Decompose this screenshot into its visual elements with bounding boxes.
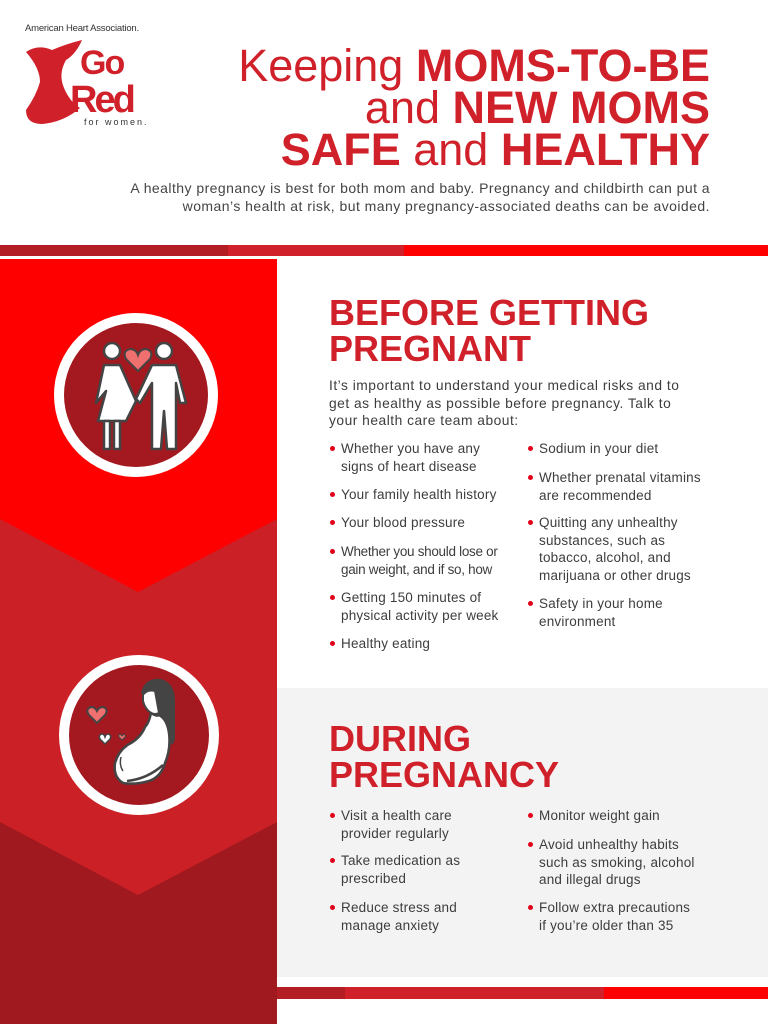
bullet list: before pregnancy: tobacco, alcohol, and (539, 550, 671, 565)
bullet list: during pregnancy: such as smoking, alcohol (539, 854, 695, 870)
bullet list: during pregnancy: prescribed (341, 870, 406, 886)
bullet list: during pregnancy: if you’re older than 35 (539, 918, 673, 932)
bullet list: before pregnancy: gain weight, and if so, how (341, 562, 492, 576)
bullet list: before pregnancy: physical activity per week (341, 608, 499, 622)
bullet list: during pregnancy: Follow extra precautions (539, 900, 690, 915)
logo (25, 23, 149, 127)
left column chevrons (0, 259, 277, 1024)
bullet list: before pregnancy: Sodium in your diet (539, 441, 658, 456)
logo: red dress and wordmark: Go (80, 44, 124, 82)
logo: association name: American Heart Association. (25, 23, 139, 34)
bullet list: before pregnancy: Your blood pressure (341, 515, 465, 530)
bullet list: before pregnancy: Getting 150 minutes of (341, 590, 481, 605)
bullet list: before pregnancy (330, 441, 701, 651)
bullet list: before pregnancy: Healthy eating (341, 636, 430, 651)
heading (329, 292, 649, 369)
section: before getting pregnant (329, 292, 679, 428)
bullet list: before pregnancy: are recommended (539, 488, 652, 502)
subtitle (130, 180, 710, 214)
bullet list: during pregnancy (330, 808, 695, 933)
bullet list: before pregnancy: substances, such as (539, 532, 665, 548)
bullet list: during pregnancy: Visit a health care (341, 808, 452, 823)
bullet list: before pregnancy: Whether you have any (341, 441, 480, 456)
body (115, 713, 170, 784)
bullet list: before pregnancy: signs of heart disease (341, 458, 477, 474)
intro text: your health care team about: (329, 413, 519, 428)
heading: BEFORE GETTING (329, 292, 649, 333)
subtitle: A healthy pregnancy is best for both mom and baby. Pregnancy and childbirth can put a (130, 180, 710, 196)
bullet list: before pregnancy: Whether you should lose or (341, 544, 498, 559)
hair (141, 679, 175, 745)
bullet list: before pregnancy: environment (539, 614, 616, 628)
bullet list: before pregnancy: Quitting any unhealthy (539, 515, 678, 530)
bullet list: during pregnancy: provider regularly (341, 826, 449, 840)
bullet list: during pregnancy: Take medication as (341, 853, 460, 868)
heading: DURING (329, 718, 471, 759)
title (238, 40, 710, 175)
face (143, 690, 159, 714)
intro text: It’s important to understand your medical risks and to (329, 378, 679, 393)
bullet list: before pregnancy: marijuana or other drugs (539, 568, 691, 582)
logo: red dress and wordmark: Red (70, 79, 134, 121)
logo: red dress and wordmark: for women. (84, 117, 149, 127)
title: SAFE and HEALTHY (281, 124, 710, 175)
intro text: get as healthy as possible before pregnancy. Talk to (329, 396, 671, 410)
bullet list: during pregnancy: Avoid unhealthy habits (539, 837, 679, 852)
bullet list: before pregnancy: Safety in your home (539, 596, 663, 611)
bullet list: during pregnancy: manage anxiety (341, 918, 439, 932)
bullet list: before pregnancy: Your family health history (341, 487, 497, 502)
intro text (329, 378, 679, 428)
icon: pregnant woman (59, 655, 219, 815)
heading: PREGNANCY (329, 754, 559, 795)
top stripe (0, 245, 768, 256)
logo: red dress and wordmark (26, 40, 149, 127)
bullet list: before pregnancy: Whether prenatal vitamins (539, 470, 701, 485)
bullet list: during pregnancy: Monitor weight gain (539, 808, 660, 823)
title: and NEW MOMS (365, 82, 710, 133)
panel: during pregnancy (277, 688, 768, 977)
bullet list: during pregnancy: Reduce stress and (341, 900, 457, 915)
title: Keeping MOMS-TO-BE (238, 40, 710, 91)
heading: PREGNANT (329, 328, 531, 369)
subtitle: woman’s health at risk, but many pregnancy-associated deaths can be avoided. (183, 198, 710, 214)
bottom stripe (277, 987, 768, 999)
icon: couple with heart (54, 313, 218, 477)
heading (329, 718, 559, 795)
bullet list: during pregnancy: and illegal drugs (539, 872, 641, 887)
